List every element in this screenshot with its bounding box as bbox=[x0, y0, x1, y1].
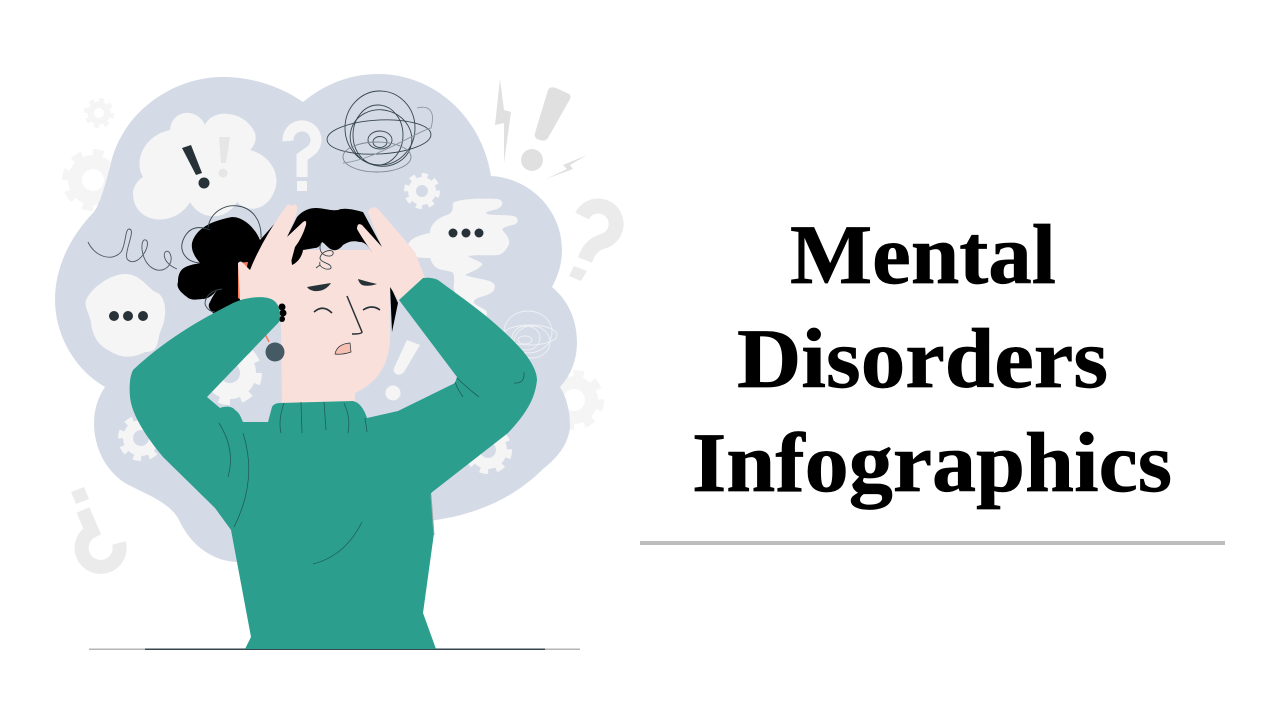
side edge line bbox=[431, 495, 434, 535]
title underline bbox=[640, 541, 1225, 545]
closed eyes bbox=[314, 307, 380, 313]
icon: gear lower right bbox=[467, 429, 509, 471]
mouth bbox=[335, 343, 351, 354]
icon: gear behind neck bbox=[202, 345, 258, 401]
illustration: stressed woman with thought cloud bbox=[55, 74, 616, 650]
eyebrows bbox=[307, 279, 377, 291]
sweater fold lines bbox=[219, 372, 524, 564]
woman figure bbox=[130, 204, 537, 649]
ellipsis dots bbox=[448, 228, 484, 238]
face and neck bbox=[280, 250, 390, 405]
icon: light exclamation bbox=[218, 137, 230, 178]
background thought blob bbox=[55, 74, 577, 562]
ground line bbox=[89, 648, 580, 650]
icon: dark exclamation bbox=[182, 145, 210, 188]
speech bubble left bbox=[86, 274, 165, 357]
scribble top bbox=[326, 91, 433, 173]
curly line left bbox=[88, 229, 177, 270]
bun loose strands bbox=[182, 206, 261, 312]
facial features bbox=[307, 243, 380, 354]
smoke speech bubble right bbox=[407, 199, 518, 320]
right hand bbox=[357, 207, 425, 302]
hair wisp by cuff bbox=[278, 304, 286, 322]
icon: grey question mark right bbox=[569, 206, 616, 281]
left hand bbox=[238, 204, 306, 307]
title: Mental bbox=[790, 208, 1056, 302]
icon: large gear left bbox=[66, 153, 120, 207]
icon: large gear right bbox=[548, 374, 600, 426]
nose bbox=[347, 296, 362, 334]
icon: large grey exclamation bbox=[521, 87, 571, 171]
right side hair bbox=[390, 285, 398, 332]
icon: inverted question mark lower left bbox=[71, 487, 120, 567]
title bbox=[692, 208, 1172, 510]
black armpit shadows bbox=[182, 396, 432, 493]
thought cloud with exclamation marks bbox=[133, 113, 277, 219]
icon: gear lower left bbox=[121, 418, 161, 458]
hair bun bbox=[177, 217, 285, 330]
title: Disorders bbox=[737, 312, 1108, 406]
icon: white exclamation near chin bbox=[386, 340, 420, 400]
icon: small gear top left bbox=[86, 100, 112, 126]
ellipsis dots bbox=[109, 311, 148, 321]
title: Infographics bbox=[692, 416, 1172, 510]
forehead curl bbox=[316, 243, 333, 269]
top hair bbox=[287, 208, 382, 265]
green sweater bbox=[130, 278, 537, 649]
coral hair tie bbox=[238, 262, 248, 300]
scribble lower right bbox=[503, 311, 557, 358]
icon: gear near head bbox=[407, 176, 437, 206]
earring bbox=[264, 332, 284, 362]
icon: small lightning bbox=[546, 155, 587, 179]
icon: big lightning bbox=[495, 79, 511, 163]
icon: question mark on blob bbox=[288, 126, 316, 191]
